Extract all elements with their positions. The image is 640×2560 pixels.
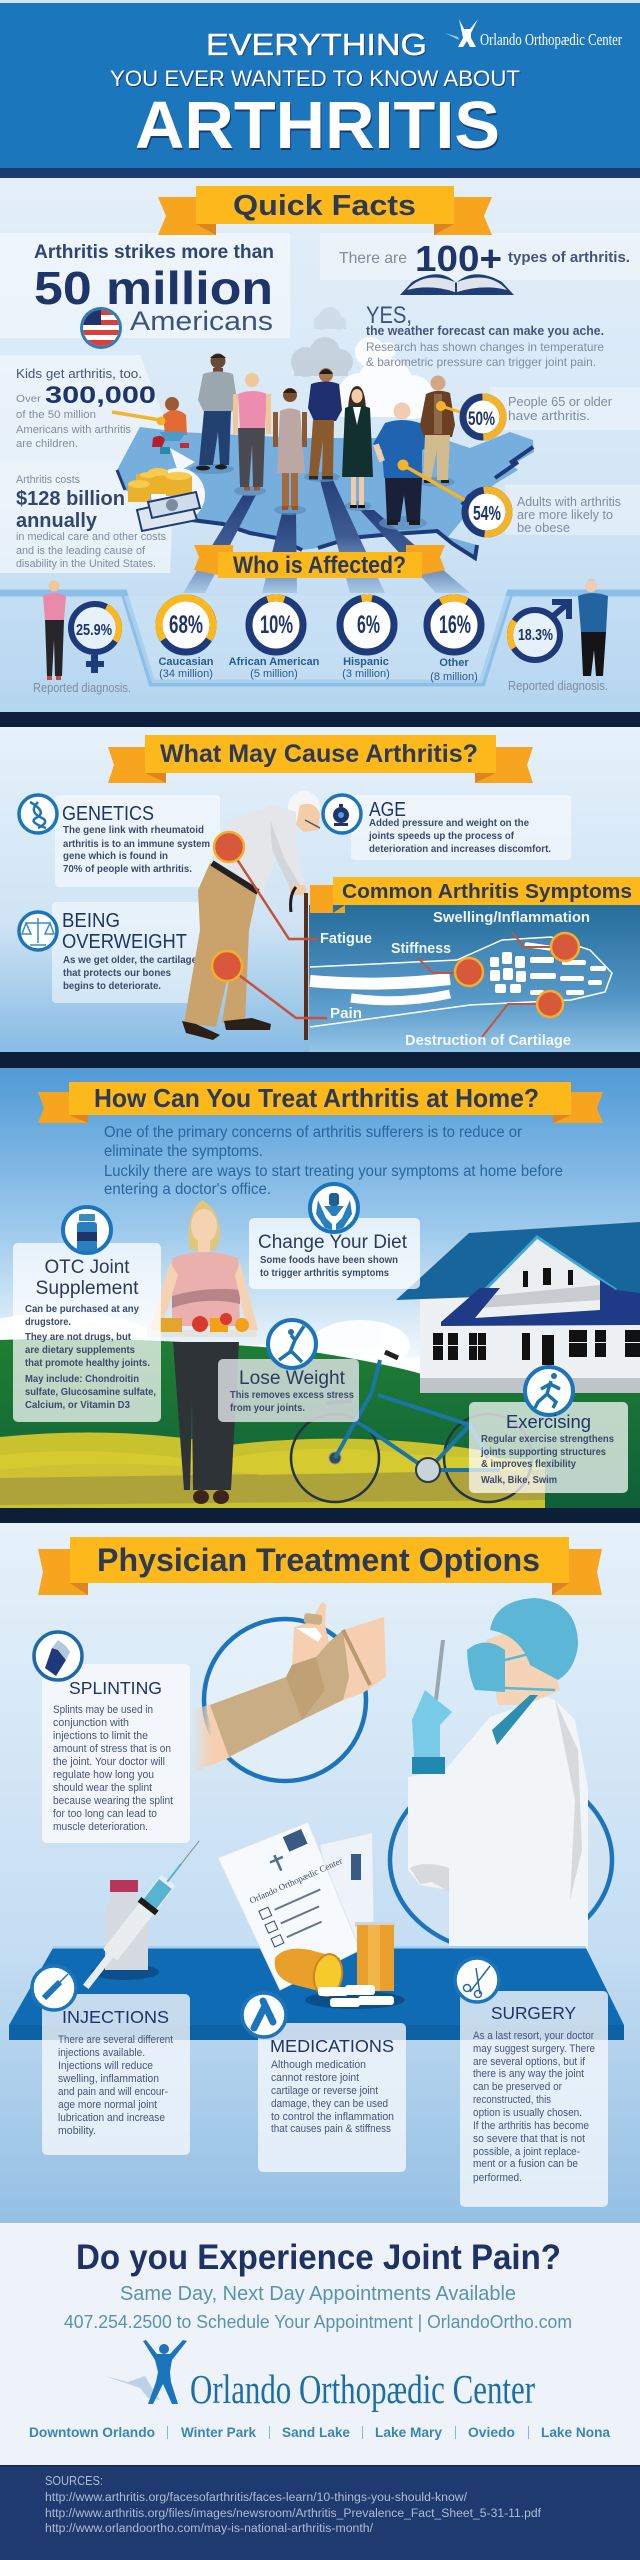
card: injections: age more normal joint (58, 2099, 157, 2111)
chart: Other 16 percent: (8 million) (430, 671, 478, 683)
card: surgery: performed. (473, 2172, 522, 2184)
illustration: prescription papers: Orlando Orthopædic Center (248, 1856, 344, 1906)
panel: common arthritis symptoms: Destruction of Cartilage (405, 1033, 571, 1049)
fact: weather: Research has shown changes in temperature (366, 340, 604, 354)
map: United States (117, 427, 534, 593)
card: surgery: As a last resort, your doctor (473, 2030, 594, 2042)
fact: kids (16, 367, 166, 450)
text: locations: Lake Nona (541, 2424, 610, 2440)
fact: $128 billion cost (16, 468, 200, 570)
illustration: vial and syringe (77, 1834, 208, 1993)
fact: kids: Kids get arthritis, too. (16, 367, 142, 381)
fact: 50 million Americans: Americans (130, 306, 273, 336)
card: being overweight (19, 902, 200, 1003)
card: medications: that causes pain & stiffness (271, 2123, 391, 2135)
white cloud near coins (151, 448, 205, 522)
chart: Other 16 percent: 16% (439, 611, 471, 639)
card: age (323, 795, 571, 860)
card: OTC joint supplement (13, 1207, 161, 1422)
heading ribbon: Physician Treatment Options: Physician Treatment Options (97, 1542, 540, 1578)
title: EVERYTHING (206, 27, 427, 62)
fact: 100+ types (339, 238, 630, 295)
card: OTC joint supplement: Calcium, or Vitamin D3 (25, 1399, 130, 1411)
card: OTC joint supplement: May include: Chondroitin (25, 1373, 139, 1385)
card: age: Added pressure and weight on the (369, 817, 529, 829)
person: man in gray sweater (196, 354, 237, 470)
card: injections: Injections will reduce (58, 2060, 153, 2072)
card: lose weight (218, 1320, 359, 1422)
title: YOU EVER WANTED TO KNOW ABOUT (110, 66, 520, 91)
card: surgery: possible, a joint replace- (473, 2146, 580, 2158)
divider band (0, 712, 640, 727)
text: locations: Oviedo (468, 2424, 515, 2440)
card: injections (32, 1966, 190, 2155)
card: splinting (34, 1632, 190, 1843)
person: man in navy sweater (308, 368, 342, 480)
icon: stretching figure (268, 1320, 316, 1368)
chart: Hispanic 6 percent: Hispanic (343, 656, 389, 668)
card: exercising: Regular exercise strengthens (481, 1433, 614, 1445)
text: adults with arthritis: be obese (517, 520, 570, 535)
fact: $128 billion cost: in medical care and other costs (16, 531, 166, 543)
fact: 50 million Americans (34, 242, 274, 349)
icon: stopwatch (323, 795, 361, 833)
card: splinting: muscle deterioration. (53, 1821, 148, 1833)
card: splinting: should wear the splint (53, 1782, 152, 1794)
icon: pills (242, 1993, 286, 2037)
stat: women 25.9 percent (33, 580, 131, 695)
panel: sources: http://www.orlandoortho.com/may-is-national-arthritis-month/ (45, 2523, 374, 2535)
text: locations: Sand Lake (282, 2424, 350, 2440)
card: OTC joint supplement: drugstore. (25, 1316, 71, 1328)
illustration: fields (0, 1339, 640, 1508)
panel: sources (0, 2465, 640, 2560)
fact: kids: Americans with arthritis (16, 424, 131, 436)
divider band (0, 1052, 640, 1068)
illustration: prescription papers (218, 1819, 374, 1990)
card: splinting: amount of stress that is on (53, 1743, 171, 1755)
illustration: doctor (390, 1598, 612, 1960)
card: surgery (455, 1958, 608, 2207)
panel: treat arthritis at home (0, 1068, 640, 1508)
card: splinting: because wearing the splint (53, 1795, 173, 1807)
card: splinting: regulate how long you (53, 1769, 154, 1781)
illustration: woman with food tray (147, 1200, 258, 1504)
card: being overweight: As we get older, the cartilage (63, 954, 197, 966)
card: surgery: ment or a fusion can be (473, 2158, 578, 2170)
icon: coins and bills (128, 468, 200, 531)
card: genetics: arthritis is to an immune system (63, 838, 210, 850)
fact: weather: the weather forecast can make you ache. (366, 324, 604, 338)
icon: hands holding food (310, 1184, 358, 1232)
panel: sources: http://www.arthritis.org/files/images/newsroom/Arthritis_Prevalence_Fact_Sheet_5-31-11.pdf (45, 2508, 542, 2520)
fact: kids: are children. (16, 438, 78, 450)
panel: common arthritis symptoms: Stiffness (391, 940, 451, 957)
fact: 50 million Americans: 50 million (34, 262, 273, 314)
person: woman in black suit (342, 386, 373, 508)
icon: scale (19, 912, 57, 950)
card: being overweight: that protects our bones (63, 967, 171, 979)
stat: men 18.3 percent: Reported diagnosis. (508, 679, 608, 693)
card: age: joints speeds up the process of (368, 830, 514, 842)
text: locations (29, 2424, 610, 2440)
fact: weather: & barometric pressure can trigger joint pain. (366, 355, 596, 369)
card: OTC joint supplement: sulfate, Glucosamine sulfate, (25, 1386, 156, 1398)
chart: Other 16 percent: Other (439, 657, 469, 669)
text: adults with arthritis: Adults with arthritis (517, 494, 621, 509)
panel: common arthritis symptoms (309, 877, 640, 1052)
card: exercising: joints supporting structures (480, 1446, 606, 1458)
fact: $128 billion cost: and is the leading cause of (16, 545, 146, 557)
person: child sitting (152, 397, 189, 454)
panel: who is affected stat band (0, 593, 640, 683)
panel: common arthritis symptoms: Common Arthritis Symptoms (342, 880, 632, 903)
text: people 65 or older: have arthritis. (508, 408, 590, 423)
illustration: table (9, 1946, 624, 2040)
title: YOU EVER WANTED TO KNOW ABOUT (111, 67, 521, 92)
logo: Orlando Orthopaedic Center (105, 2340, 535, 2412)
card: surgery: SURGERY (491, 2003, 576, 2023)
card: injections: and pain and will encour- (58, 2086, 168, 2098)
card: age: deterioration and increases discomfort. (369, 843, 551, 855)
card: surgery: may suggest surgery. There (473, 2043, 595, 2055)
card: genetics: gene which is found in (63, 850, 168, 862)
fact: kids: Over (16, 394, 42, 405)
card: splinting: for too long can lead to (53, 1808, 157, 1820)
card: OTC joint supplement: Supplement (36, 1278, 139, 1299)
text: intro (104, 1124, 563, 1198)
illustration: older man with cane (182, 791, 327, 1040)
card: OTC joint supplement: They are not drugs, but (25, 1331, 131, 1343)
fact: $128 billion cost: disability in the United States. (16, 558, 156, 570)
text: phone and website: 407.254.2500 to Schedule Your Appointment | OrlandoOrtho.com (64, 2312, 572, 2332)
text: appointments: Same Day, Next Day Appointments Available (120, 2283, 516, 2305)
icon: DNA (19, 795, 57, 833)
card: genetics: 70% of people with arthritis. (63, 863, 192, 875)
card: genetics (19, 795, 220, 887)
card: splinting: injections to limit the (53, 1730, 148, 1742)
illustration: wrist splint (192, 1602, 386, 1781)
fact: kids: 300,000 (45, 382, 156, 409)
card: injections: injections available. (58, 2047, 145, 2059)
chart: Caucasian 68 percent: (34 million) (159, 668, 213, 680)
card: exercising (469, 1367, 628, 1493)
card: medications: Although medication (271, 2059, 366, 2071)
heading ribbon: Who is Affected? (194, 545, 445, 579)
fact: 100+ types: 100+ (415, 238, 502, 279)
chart: Hispanic 6 percent (335, 593, 399, 680)
heading ribbon: How Can You Treat Arthritis at Home? (38, 1082, 603, 1123)
card: change your diet: Some foods have been shown (260, 1254, 398, 1266)
fact: weather: YES, (366, 302, 412, 329)
heading ribbon: Quick Facts (158, 186, 492, 235)
card: lose weight: from your joints. (230, 1402, 305, 1414)
icon: clouds (291, 307, 434, 419)
icon: syringe (32, 1966, 76, 2010)
card: age: AGE (369, 799, 406, 821)
logo: Orlando Orthopaedic Center: Orlando Orthopædic Center (190, 2366, 535, 2412)
card: being overweight: begins to deteriorate. (63, 980, 161, 992)
card: lose weight: Lose Weight (239, 1368, 346, 1389)
text: locations: Lake Mary (375, 2424, 442, 2440)
card: surgery: can be preserved or (473, 2081, 562, 2093)
fact: $128 billion cost: $128 billion (16, 488, 125, 510)
stat: men 18.3 percent: 18.3% (518, 627, 553, 644)
card: surgery: so severe that that is not (473, 2133, 585, 2145)
chart: African American 10 percent (229, 591, 320, 680)
text: locations: Winter Park (181, 2424, 256, 2440)
chart: African American 10 percent: African American (229, 656, 320, 668)
text: people 65 or older: People 65 or older (508, 394, 613, 409)
panel: physician treatment options (0, 1523, 640, 2223)
icon: runner (525, 1367, 573, 1415)
fact: kids: of the 50 million (16, 409, 96, 421)
card: surgery: reconstructed, this (473, 2094, 551, 2106)
text: adults with arthritis: are more likely to (517, 507, 613, 522)
text: intro: Luckily there are ways to start treating your symptoms at home before (104, 1163, 563, 1180)
person: older man in brown jacket (420, 376, 455, 483)
fact: 100+ types: There are (339, 250, 407, 267)
stat: women 25.9 percent: 25.9% (76, 622, 112, 639)
panel: sources: http://www.arthritis.org/facesofarthritis/faces-learn/10-things-you-should-know/ (45, 2492, 468, 2504)
card: injections: swelling, inflammation (58, 2073, 159, 2085)
chart: 54 percent ring: 54% (473, 503, 501, 525)
heading ribbon: Physician Treatment Options (38, 1537, 602, 1595)
heading ribbon: What May Cause Arthritis?: What May Cause Arthritis? (160, 740, 478, 768)
card: lose weight: This removes excess stress (230, 1389, 354, 1401)
card: injections: There are several different (58, 2034, 173, 2046)
card: splinting: conjunction with (53, 1717, 129, 1729)
card: being overweight: BEING (62, 910, 120, 932)
card: splinting: Splints may be used in (53, 1704, 153, 1716)
heading ribbon: Quick Facts: Quick Facts (233, 190, 416, 222)
card: OTC joint supplement: that promote healthy joints. (25, 1357, 150, 1369)
title (110, 27, 521, 165)
card: medications (242, 1993, 406, 2172)
card: exercising: Walk, Bike, Swim (481, 1474, 557, 1486)
text: intro: entering a doctor's office. (104, 1181, 271, 1198)
icon: scissors (455, 1958, 499, 2002)
card: medications: to control the inflammation (271, 2111, 394, 2123)
illustration: pill bottles (275, 1922, 405, 2009)
divider band (0, 1508, 640, 1523)
icon: supplement bottle (63, 1207, 111, 1253)
card: surgery: If the arthritis has become (473, 2120, 589, 2132)
text: adults with arthritis (517, 494, 621, 535)
card: being overweight: OVERWEIGHT (62, 931, 187, 953)
card: injections: INJECTIONS (62, 2007, 169, 2027)
stat: women 25.9 percent: Reported diagnosis. (33, 681, 131, 695)
fact: 50 million Americans: Arthritis strikes more than (34, 242, 274, 263)
panel: common arthritis symptoms: Pain (330, 1005, 362, 1022)
header band (0, 0, 640, 178)
card: change your diet: to trigger arthritis symptoms (260, 1267, 389, 1279)
card: medications: MEDICATIONS (270, 2036, 394, 2056)
chart: African American 10 percent: (5 million) (250, 668, 298, 680)
illustration: arm skeleton (310, 937, 612, 1027)
chart: 54 percent ring (398, 460, 512, 537)
fact: weather (366, 302, 604, 369)
chart: African American 10 percent: 10% (260, 611, 293, 639)
title: ARTHRITIS (136, 90, 501, 165)
panel: call to action footer (0, 2223, 640, 2466)
card: change your diet (249, 1184, 420, 1289)
chart: Caucasian 68 percent: 68% (169, 611, 203, 639)
card: surgery: are several options, but if (473, 2056, 586, 2068)
panel: what may cause arthritis (0, 727, 640, 1052)
heading ribbon: How Can You Treat Arthritis at Home?: How Can You Treat Arthritis at Home? (94, 1083, 539, 1113)
card: injections: lubrication and increase (58, 2112, 165, 2124)
icon: hand in splint (34, 1632, 82, 1680)
card: change your diet: Change Your Diet (258, 1232, 408, 1253)
card: medications: cartilage or reverse joint (271, 2085, 378, 2097)
heading ribbon: Who is Affected?: Who is Affected? (233, 552, 406, 579)
chart: 50 percent ring (436, 397, 503, 437)
card: surgery: option is usually chosen. (473, 2107, 582, 2119)
icon: book (400, 274, 514, 295)
illustration: house (396, 1222, 640, 1393)
text: people 65 or older (508, 394, 613, 423)
text: intro: eliminate the symptoms. (104, 1143, 263, 1160)
illustration: bicycle (291, 1352, 532, 1502)
person: heavy man in blue shirt (373, 402, 432, 525)
stat: men 18.3 percent (501, 578, 608, 693)
chart: Caucasian 68 percent (149, 588, 223, 680)
chart: Caucasian 68 percent: Caucasian (158, 656, 214, 668)
card: exercising: Exercising (506, 1411, 591, 1432)
panel: common arthritis symptoms: Swelling/Inflammation (433, 910, 590, 926)
card: injections: mobility. (58, 2125, 96, 2137)
heading: Do you experience joint pain: Do you Experience Joint Pain? (76, 2238, 561, 2277)
card: surgery: there is any way the joint (473, 2068, 584, 2080)
card: genetics: GENETICS (62, 803, 154, 825)
chart: 50 percent ring: 50% (468, 409, 495, 430)
text: locations: Downtown Orlando (29, 2424, 155, 2440)
logo: Orlando Orthopaedic Center (445, 19, 622, 49)
card: genetics: The gene link with rheumatoid (63, 824, 204, 836)
person: blonde woman in pink shirt (233, 373, 271, 490)
fact: $128 billion cost: annually (16, 510, 98, 532)
card: OTC joint supplement: are dietary supplements (25, 1344, 135, 1356)
illustration: clouds (0, 1313, 410, 1378)
card: medications: cannot restore joint (271, 2072, 359, 2084)
title: ARTHRITIS (135, 88, 500, 163)
fact: 100+ types: types of arthritis. (508, 249, 630, 266)
fact: $128 billion cost: Arthritis costs (16, 474, 80, 486)
card: OTC joint supplement: OTC Joint (44, 1257, 130, 1278)
panel: sources: SOURCES: (45, 2474, 103, 2488)
card: splinting: SPLINTING (69, 1678, 162, 1698)
text: intro: One of the primary concerns of arthritis sufferers is to reduce or (104, 1124, 522, 1141)
people illustration (151, 354, 455, 530)
chart: Hispanic 6 percent: (3 million) (342, 668, 390, 680)
person: woman in mauve dress (273, 388, 307, 510)
card: exercising: & improves flexibility (481, 1458, 576, 1470)
heading ribbon: What May Cause Arthritis? (108, 735, 533, 783)
card: splinting: the joint. Your doctor will (53, 1756, 165, 1768)
card: OTC joint supplement: Can be purchased at any (25, 1303, 139, 1315)
icon: US flag (80, 307, 122, 349)
panel: quick facts and who is affected background (0, 178, 640, 712)
chart: Other 16 percent (417, 588, 491, 683)
chart: Hispanic 6 percent: 6% (357, 611, 380, 639)
panel: common arthritis symptoms: Fatigue (320, 930, 372, 947)
card: medications: damage, they can be used (271, 2098, 388, 2110)
title: EVERYTHING (207, 28, 428, 63)
